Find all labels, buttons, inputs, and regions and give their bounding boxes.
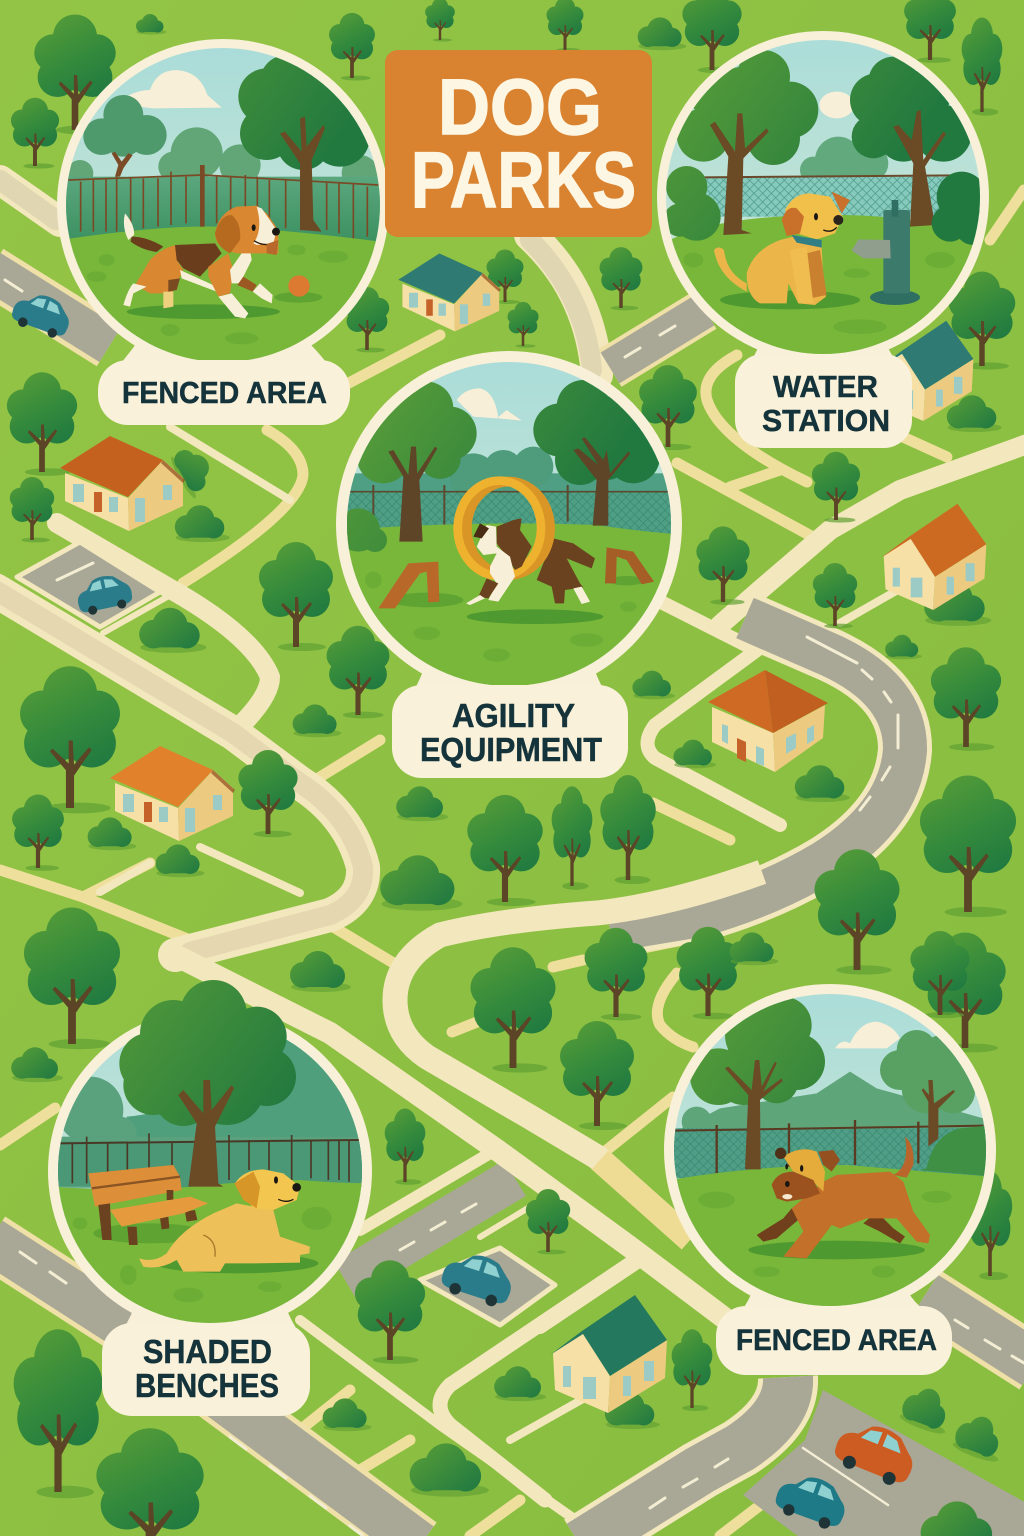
label: fenced area 2 — [716, 1306, 952, 1375]
panel: fenced area brown dog — [660, 975, 1000, 1316]
houses — [60, 253, 986, 1413]
label: water station — [735, 354, 912, 448]
label: water station: STATION — [762, 403, 890, 438]
beige main path — [0, 180, 762, 1317]
label: shaded benches: SHADED — [143, 1333, 272, 1370]
panel: water station puppy — [657, 31, 989, 354]
label: agility equipment: AGILITY — [452, 697, 575, 734]
title text — [411, 62, 636, 224]
label: shaded benches — [102, 1323, 310, 1416]
label: water station: WATER — [773, 369, 878, 404]
panel: fenced area beagle — [57, 39, 393, 373]
label: agility equipment: EQUIPMENT — [420, 731, 602, 768]
label: shaded benches: BENCHES — [135, 1367, 279, 1404]
label: fenced area — [98, 360, 350, 425]
title text: DOG — [438, 62, 602, 151]
label: agility equipment — [392, 685, 628, 778]
label: fenced area: FENCED AREA — [122, 375, 327, 410]
shade tree — [119, 980, 296, 1187]
title banner — [385, 50, 652, 237]
panel: shaded benches — [40, 970, 380, 1333]
label: fenced area 2: FENCED AREA — [736, 1324, 937, 1357]
panel: agility equipment — [336, 350, 687, 697]
title text: PARKS — [411, 135, 636, 224]
cars — [8, 287, 922, 1534]
